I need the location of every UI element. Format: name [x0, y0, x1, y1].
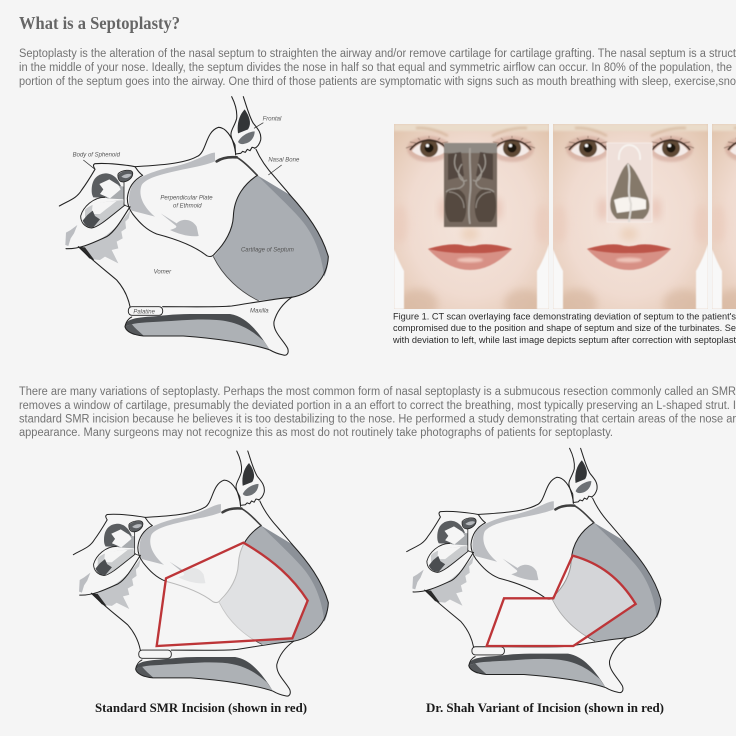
septum overlay	[607, 143, 652, 222]
CT scan overlay	[444, 143, 497, 227]
second paragraph: appearance. Many surgeons may not recognize this as most do not routinely take photographs of patients for septoplasty.	[19, 427, 613, 439]
labelled septum anatomy diagram	[59, 97, 328, 355]
labelled septum anatomy diagram: Cartilage of Septum	[241, 248, 294, 254]
red incision outline	[487, 556, 636, 646]
caption: Dr. Shah variant: Dr. Shah Variant of Incision (shown in red)	[426, 701, 664, 715]
labelled septum anatomy diagram: Palatine	[133, 309, 156, 315]
photo: face with septum illustration	[551, 124, 710, 319]
figure caption	[392, 312, 736, 346]
title: What is a Septoplasty?	[19, 13, 180, 33]
photo: face with CT scan overlay	[392, 124, 551, 319]
labelled septum anatomy diagram: Nasal Bone	[268, 157, 300, 163]
labelled septum anatomy diagram: Frontal	[263, 116, 282, 122]
caption: standard SMR incision: Standard SMR Incision (shown in red)	[95, 701, 307, 715]
intro paragraph	[19, 48, 736, 88]
labelled septum anatomy diagram: of Ethmoid	[173, 204, 202, 210]
labelled septum anatomy diagram: Vomer	[154, 270, 172, 276]
labelled septum anatomy diagram: Maxilla	[250, 308, 269, 314]
red incision outline	[157, 543, 308, 646]
diagram: Dr. Shah variant incision	[407, 448, 661, 693]
second paragraph	[19, 386, 736, 439]
photo: third face cropped at edge	[712, 124, 736, 309]
labelled septum anatomy diagram: Body of Sphenoid	[73, 152, 121, 158]
diagram: standard SMR incision	[73, 451, 328, 696]
labelled septum anatomy diagram: Perpendicular Plate	[160, 196, 213, 202]
